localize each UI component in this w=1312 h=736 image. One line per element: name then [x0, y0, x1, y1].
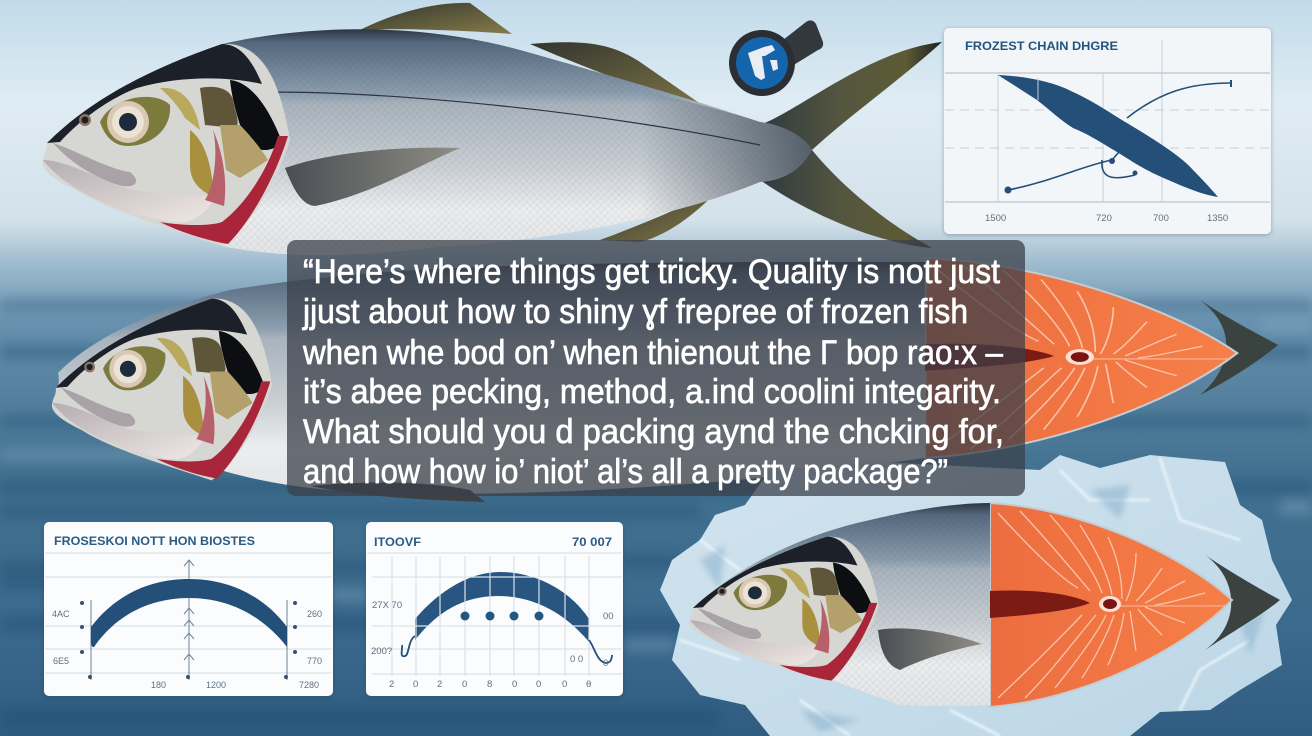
axis labels — [371, 600, 614, 690]
fish middle with salmon section — [52, 258, 1278, 502]
chart title: FROZEST CHAIN DHGRE — [965, 39, 1118, 53]
ventral fin — [600, 186, 722, 242]
body — [56, 262, 925, 494]
axis labels: 770 — [307, 656, 322, 666]
axis labels: 2 — [389, 679, 394, 690]
arc shape with segments — [415, 572, 589, 642]
axis labels: 6E5 — [53, 656, 69, 666]
axis labels: 700 — [1153, 213, 1169, 224]
head — [690, 537, 879, 682]
salmon cross-section — [925, 258, 1237, 458]
axis labels: 0 — [603, 658, 608, 669]
body — [693, 503, 990, 706]
axis labels: 8 — [487, 679, 492, 690]
quote text: “Here’s where things get tricky. Quality is nott just — [303, 253, 1001, 291]
tail fin — [760, 42, 942, 248]
ice block — [660, 455, 1292, 736]
salmon cross-section — [990, 503, 1232, 707]
body — [43, 29, 812, 255]
chart card: middle arc: 70 007 — [572, 537, 612, 549]
axis labels: 1200 — [206, 680, 226, 690]
quote text: it’s abee pecking, method, a.ind coolini integarity. — [303, 373, 1001, 411]
axis labels: 0 — [512, 679, 517, 690]
quote text: What should you d packing aynd the chcking for, — [303, 413, 1004, 451]
axis labels: 0 — [562, 679, 567, 690]
axis labels: 00 — [603, 611, 614, 622]
blade shape — [998, 75, 1218, 197]
head — [52, 299, 272, 480]
quote text — [302, 253, 1004, 491]
chart card: left arc — [44, 522, 333, 696]
chart title: ITOOVF — [374, 537, 421, 549]
icon: thermometer badge — [729, 20, 823, 96]
axis labels: 2 — [437, 679, 442, 690]
lower fin — [310, 483, 485, 502]
fish in ice with salmon section — [690, 503, 1280, 707]
trend line — [1008, 83, 1231, 190]
fish top — [43, 3, 942, 255]
axis labels: 4AC — [52, 609, 70, 619]
axis labels: 0 0 — [570, 654, 583, 665]
axis labels: 180 — [151, 680, 166, 690]
chart card: middle arc — [366, 522, 623, 696]
chart title: FROSESKOI NOTT HON BIOSTES — [54, 534, 255, 548]
pectoral fin — [285, 148, 460, 206]
axis labels: 27X 70 — [372, 600, 402, 611]
quote text: and how how io’ niot’ al’s all a pretty package?” — [303, 453, 948, 491]
axis labels — [985, 213, 1228, 224]
axis labels: 1350 — [1207, 213, 1228, 224]
head — [43, 44, 290, 246]
axis labels: 7280 — [299, 680, 319, 690]
axis labels: 0 — [462, 679, 467, 690]
axis labels: 200? — [371, 646, 392, 657]
axis labels: 260 — [307, 609, 322, 619]
data dots — [460, 612, 544, 620]
second dorsal fin — [530, 42, 718, 116]
pectoral fin — [878, 628, 982, 670]
axis labels: 720 — [1096, 213, 1112, 224]
chart card: frozen chain degree — [944, 28, 1271, 234]
quote text: when whe bod on’ when thienout the Γ bop rao:x – — [302, 334, 1003, 372]
axis labels — [52, 609, 322, 690]
axis labels: 0 — [536, 679, 541, 690]
quote text: jjust about how to shiny ɣf freρree of frozen fish — [302, 293, 968, 331]
axis labels: 0 — [413, 679, 418, 690]
axis labels: 1500 — [985, 213, 1006, 224]
arc shape — [91, 579, 287, 647]
dorsal fin — [360, 3, 512, 34]
quote panel — [287, 240, 1025, 496]
axis labels: θ — [586, 679, 591, 690]
